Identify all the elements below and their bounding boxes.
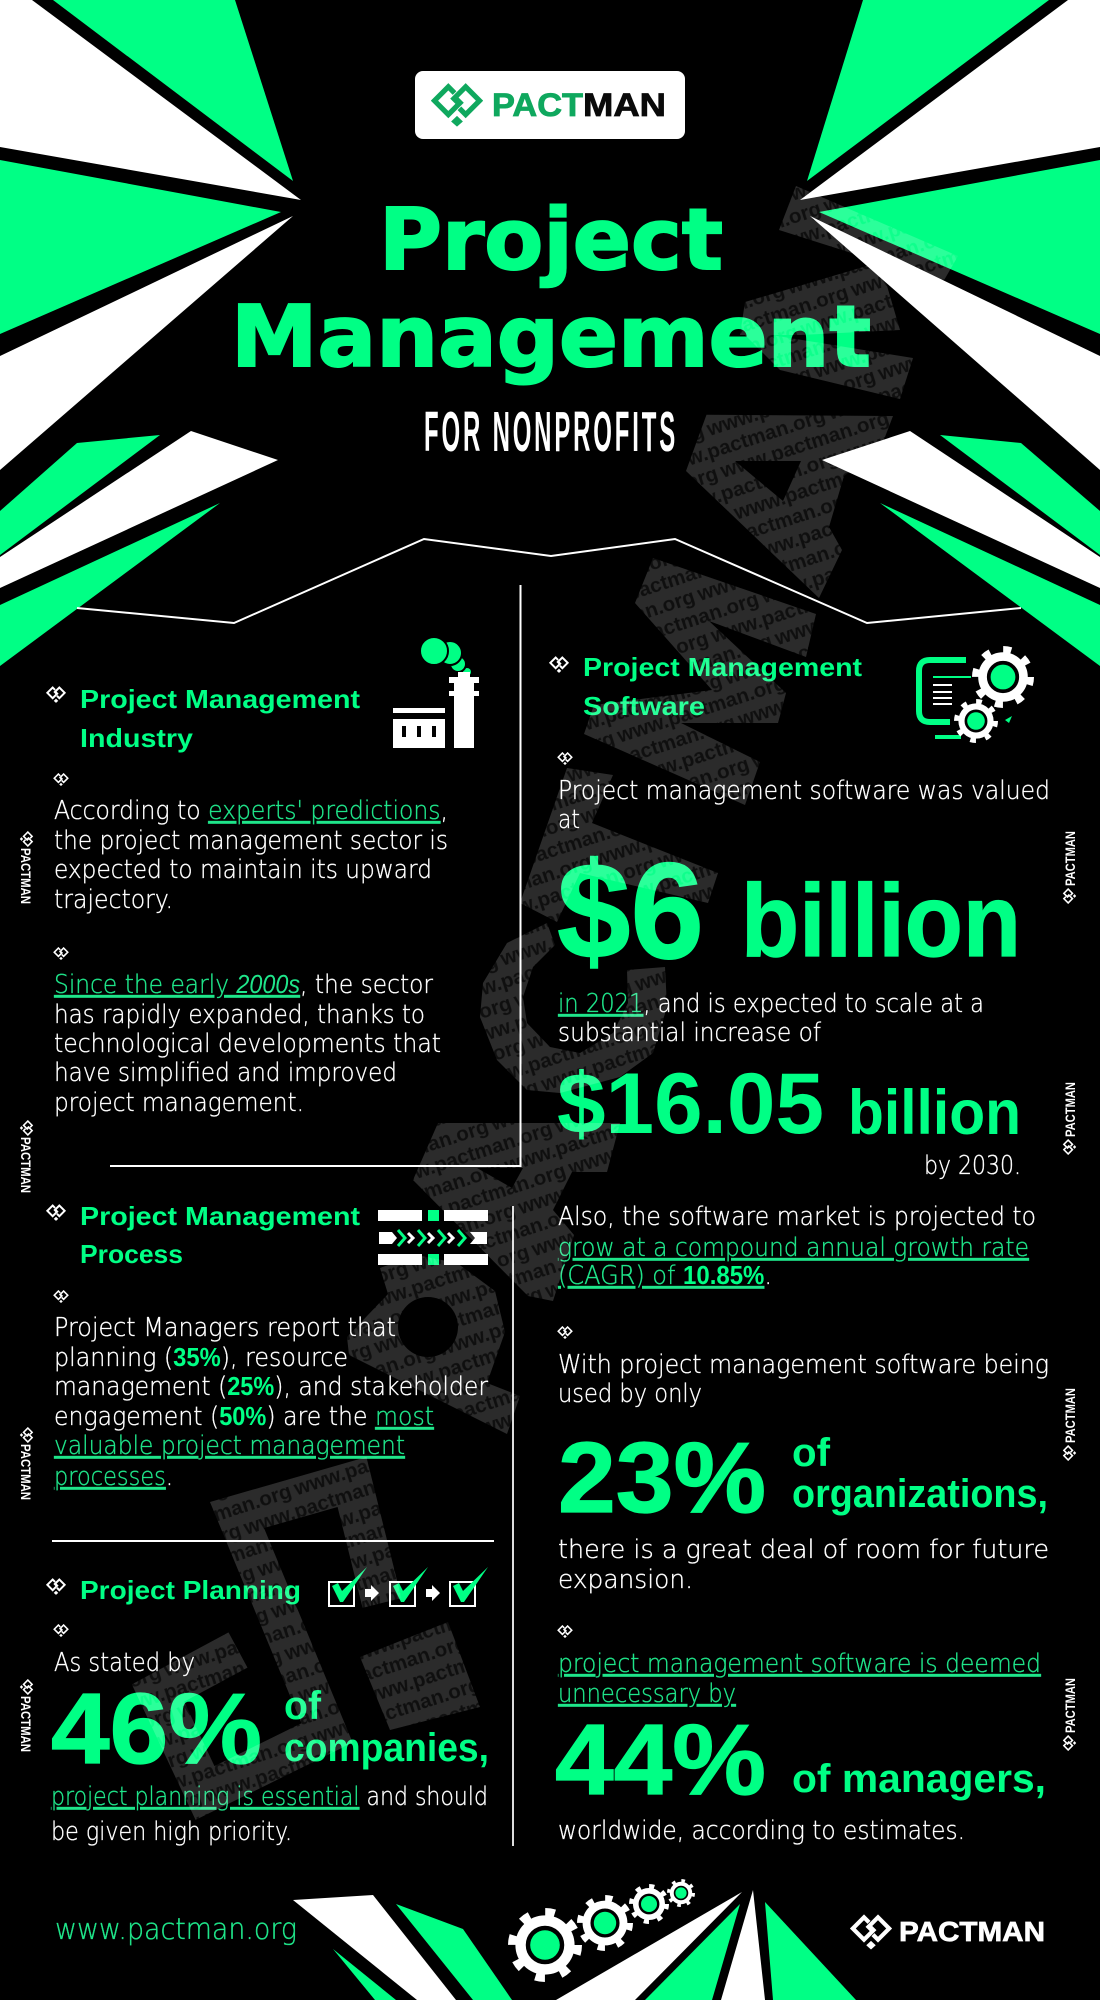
stat: 46% of companies: of [284,1684,322,1728]
text: experts predictions: the project management sector is [54,826,448,856]
text: planning essential: project planning is essential and should [51,1782,488,1812]
icon: bullet [54,948,68,960]
section dividers [52,585,520,1846]
icon: bullet [558,753,572,765]
text: planning essential [51,1782,488,1847]
text: valuable processes: engagement (50%) are the most [54,1401,434,1432]
logo badge [415,71,685,139]
footer logo: PACTMAN [899,1916,1045,1947]
side logos left: PACTMAN [18,848,34,904]
watermark [158,186,958,1793]
side logos right: PACTMAN [1062,1082,1078,1137]
text: cagr [558,1202,1036,1291]
icon: bullet [54,1625,68,1637]
logo badge: PACT [492,87,583,123]
panel: project planning [47,1567,489,1847]
icon: bullet [558,1327,572,1339]
stat: 44% of managers: 44% [555,1704,766,1816]
text: valuable processes: valuable project management [54,1431,405,1461]
text: deemed unnecessary: unnecessary by [558,1679,736,1709]
text: since the early 2000s: project management. [54,1088,304,1118]
footer logo [853,1916,1045,1950]
stat: 46% of companies: companies, [284,1726,489,1770]
heading: industry: Project Management [80,684,360,714]
side logos right: PACTMAN [1062,831,1078,886]
text: by 2030: by 2030. [924,1151,1021,1181]
icon: factory [393,637,479,748]
title: Management [231,288,871,387]
title: Project [379,191,723,290]
heading: process [80,1201,360,1269]
stat: 44% of managers: of managers, [792,1757,1046,1801]
stat: 23% of organizations: 23% [558,1422,766,1534]
icon: bullet [54,774,68,786]
footer website: www.pactman.org [55,1912,297,1946]
stat: 23% of organizations [558,1422,1048,1534]
panel: project management industry [47,637,479,1118]
stat: $6 billion [557,835,1021,988]
footer burst shapes [293,1890,856,2000]
stat: 23% of organizations: organizations, [792,1472,1048,1516]
side logos left [18,832,34,1752]
footer gears [512,1881,693,1978]
text: since the early 2000s: have simplified and improved [54,1058,397,1088]
text: being used by only: used by only [558,1379,702,1409]
text: since the early 2000s: has rapidly expanded, thanks to [54,1000,425,1030]
stat: 46% of companies [51,1673,489,1785]
side logos right: PACTMAN [1062,1678,1078,1733]
icon: bullet [47,1580,65,1595]
text: being used by only [558,1350,1049,1409]
side logos left: PACTMAN [18,1137,34,1193]
icon: process arrows [378,1210,488,1265]
text: cagr: grow at a compound annual growth rate [558,1233,1029,1263]
text: valuable processes: processes. [54,1462,173,1492]
text: valued at [558,776,1050,835]
heading: software: Project Management [583,652,862,682]
side logos right [1062,831,1078,1750]
heading: software [583,652,862,721]
text: in 2021: in 2021, and is expected to scale at a [558,989,984,1019]
text: in 2021 [558,989,984,1048]
text: since the early 2000s: technological developments that [54,1029,441,1059]
text: room for future expansion [558,1535,1049,1595]
heading: process: Project Management [80,1201,360,1231]
text: valuable processes: Project Managers report that [54,1313,396,1343]
top right burst shapes [800,0,1100,666]
stat: $6 billion: billion [741,863,1021,978]
text: in 2021: substantial increase of [558,1018,822,1048]
text: valuable processes [54,1313,488,1492]
side logos right: PACTMAN [1062,1388,1078,1443]
side logos left: PACTMAN [18,1696,34,1752]
text: experts predictions: expected to maintain its upward [54,855,432,885]
icon: bullet [550,658,568,673]
text: deemed unnecessary [558,1649,1041,1709]
heading: process: Process [80,1239,183,1269]
text: being used by only: With project management software being [558,1350,1049,1380]
text: valued at: Project management software was valued [558,776,1050,806]
icon: software gears [919,650,1030,740]
text: experts predictions: trajectory. [54,885,173,915]
side logos left: PACTMAN [18,1444,34,1500]
panel: project management software [550,650,1050,1846]
stat: 46% of companies: 46% [51,1673,262,1785]
icon: checklist [329,1567,488,1606]
icon: bullet [54,1291,68,1303]
heading: industry: Industry [80,723,194,753]
stat: $16.05 billion [557,1056,1021,1152]
text: valued at: at [558,805,580,835]
text: cagr: Also, the software market is projected to [558,1202,1036,1232]
text: since the early 2000s [54,969,441,1118]
stat: $16.05 billion: billion [848,1078,1021,1148]
icon: bullet [47,1206,65,1221]
logo badge: MAN [583,87,666,123]
text: since the early 2000s: Since the early 2000s, the sector [54,969,433,1000]
text: worldwide: worldwide, according to estimates. [558,1816,965,1846]
text: valuable processes: planning (35%), resource [54,1342,348,1373]
subtitle: FOR NONPROFITS [424,400,675,464]
text: cagr: (CAGR) of 10.85%. [558,1260,772,1291]
text: valuable processes: management (25%), and stakeholder [54,1371,488,1402]
heading: industry [80,684,360,753]
stat: 44% of managers [555,1704,1046,1816]
text: as stated by: As stated by [54,1648,195,1678]
text: experts predictions [54,796,448,915]
stat: $6 billion: $6 [557,835,704,988]
text: room for future expansion: expansion. [558,1565,693,1595]
icon: bullet [558,1626,572,1638]
header outline stroke [77,539,1021,623]
top left burst shapes [0,0,301,666]
text: room for future expansion: there is a great deal of room for future [558,1535,1049,1565]
text: experts predictions: According to experts' predictions, [54,796,448,826]
heading: software: Software [583,691,705,721]
panel: project management process [47,1201,488,1492]
text: deemed unnecessary: project management software is deemed [558,1649,1041,1679]
stat: $16.05 billion: $16.05 [557,1056,824,1152]
stat: 23% of organizations: of [792,1431,831,1475]
icon: bullet [47,688,65,703]
heading: planning: Project Planning [80,1575,301,1605]
title [231,191,871,387]
text: planning essential: be given high priority. [51,1817,292,1847]
